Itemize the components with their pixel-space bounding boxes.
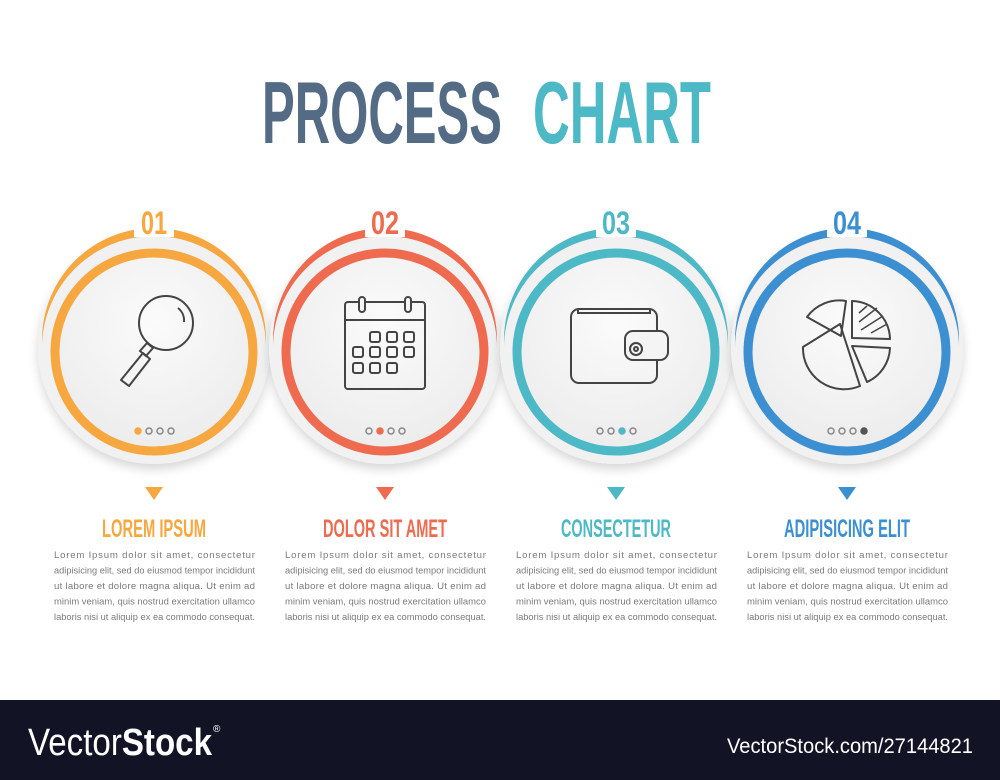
title: PROCESS <box>262 63 502 162</box>
step 3 circle <box>500 205 732 464</box>
step 2 circle: 02 <box>371 205 399 241</box>
text block 2 <box>285 550 487 623</box>
step headings: ADIPISICING ELIT <box>784 515 910 543</box>
footer bar <box>0 700 1000 780</box>
icon: wallet <box>571 309 668 383</box>
icon: magnifier <box>121 296 193 386</box>
step 4 circle <box>731 205 963 464</box>
step headings: LOREM IPSUM <box>102 515 206 543</box>
step headings: CONSECTETUR <box>561 515 671 543</box>
step headings: DOLOR SIT AMET <box>323 515 447 543</box>
text block 3 <box>516 550 718 623</box>
step 1 circle <box>38 205 270 464</box>
icon: pie chart <box>803 300 890 389</box>
title: CHART <box>533 63 711 162</box>
step 4 circle: 04 <box>833 205 861 241</box>
text block 4 <box>747 550 949 623</box>
footer bar: VectorStock.com/27144821 <box>727 735 973 758</box>
step 1 circle: 01 <box>141 205 167 241</box>
step 2 circle <box>269 205 501 464</box>
arrows <box>145 487 856 500</box>
icon: calendar <box>345 297 425 389</box>
footer bar: VectorStock <box>28 722 213 764</box>
text block 1 <box>54 550 256 623</box>
step 3 circle: 03 <box>602 205 630 241</box>
footer bar: ® <box>213 724 221 735</box>
step headings <box>102 515 910 543</box>
